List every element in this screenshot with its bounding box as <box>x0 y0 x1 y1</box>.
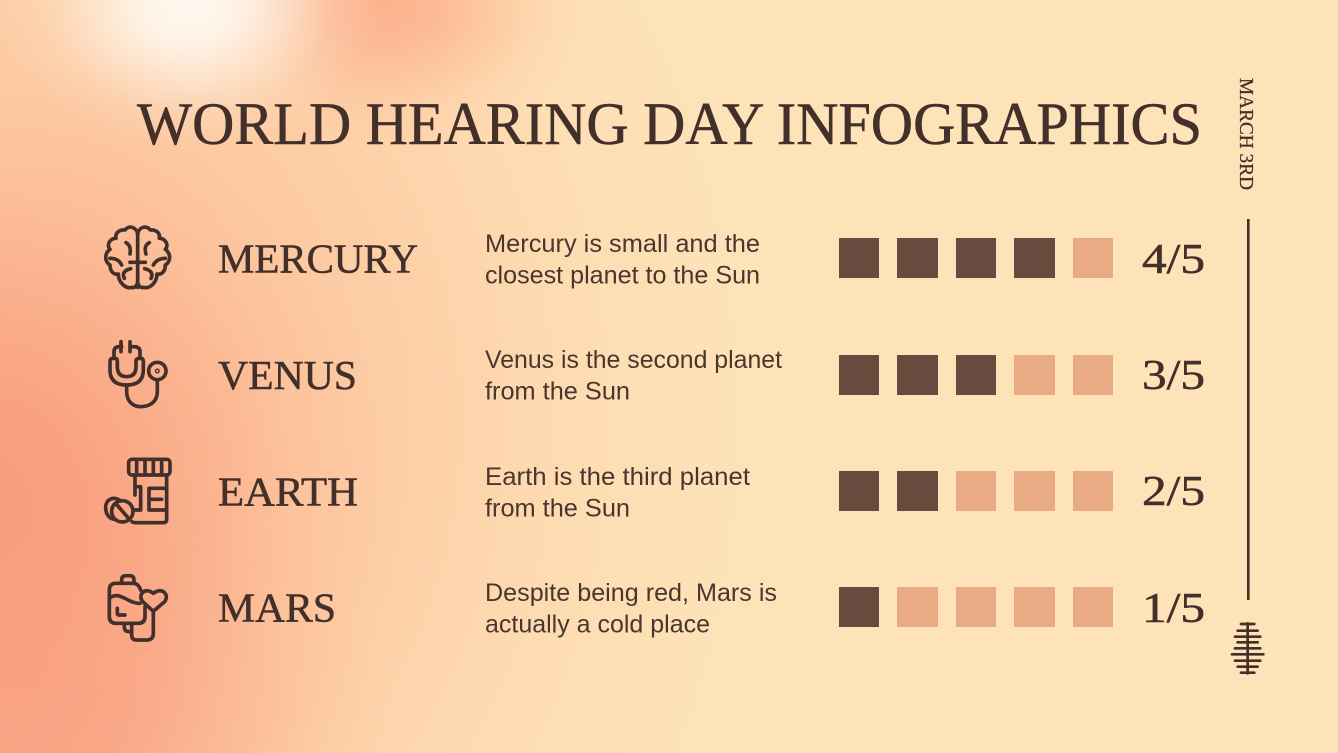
icon: medical bag with heart <box>109 576 166 640</box>
row: mercury <box>106 227 1205 290</box>
icon: stethoscope <box>110 342 166 407</box>
icon: brain <box>106 227 170 288</box>
description: mercury: closest planet to the Sun <box>485 262 760 290</box>
description: mars: Despite being red, Mars is <box>485 579 777 607</box>
label: venus: VENUS <box>218 352 357 398</box>
description: venus <box>485 346 782 406</box>
title: WORLD HEARING DAY INFOGRAPHICS <box>137 91 1202 157</box>
date label: MARCH 3RD <box>1235 78 1257 190</box>
timeline line <box>1247 219 1250 600</box>
score: venus: 3/5 <box>1142 353 1205 399</box>
rating squares: earth <box>839 471 1113 511</box>
label: mercury: MERCURY <box>218 236 418 282</box>
description: mars <box>485 579 777 638</box>
description: mercury <box>485 230 760 290</box>
row: earth <box>106 459 1205 523</box>
score: earth: 2/5 <box>1142 469 1205 515</box>
description: earth <box>485 463 750 522</box>
row: venus <box>110 342 1205 407</box>
score: mars: 1/5 <box>1142 586 1205 632</box>
rating squares: mercury <box>839 238 1113 278</box>
rating squares: venus <box>839 355 1113 395</box>
score: mercury: 4/5 <box>1142 237 1205 283</box>
row: mars <box>109 576 1205 640</box>
icon: pill bottle <box>106 459 170 523</box>
description: earth: from the Sun <box>485 494 630 522</box>
icon: sound wave <box>1232 623 1263 673</box>
description: mercury: Mercury is small and the <box>485 230 760 258</box>
description: mars: actually a cold place <box>485 610 710 638</box>
description: venus: Venus is the second planet <box>485 346 782 374</box>
rating squares: mars <box>839 587 1113 627</box>
label: mars: MARS <box>218 584 336 630</box>
label: earth: EARTH <box>218 468 358 514</box>
description: earth: Earth is the third planet <box>485 463 750 491</box>
description: venus: from the Sun <box>485 378 630 406</box>
